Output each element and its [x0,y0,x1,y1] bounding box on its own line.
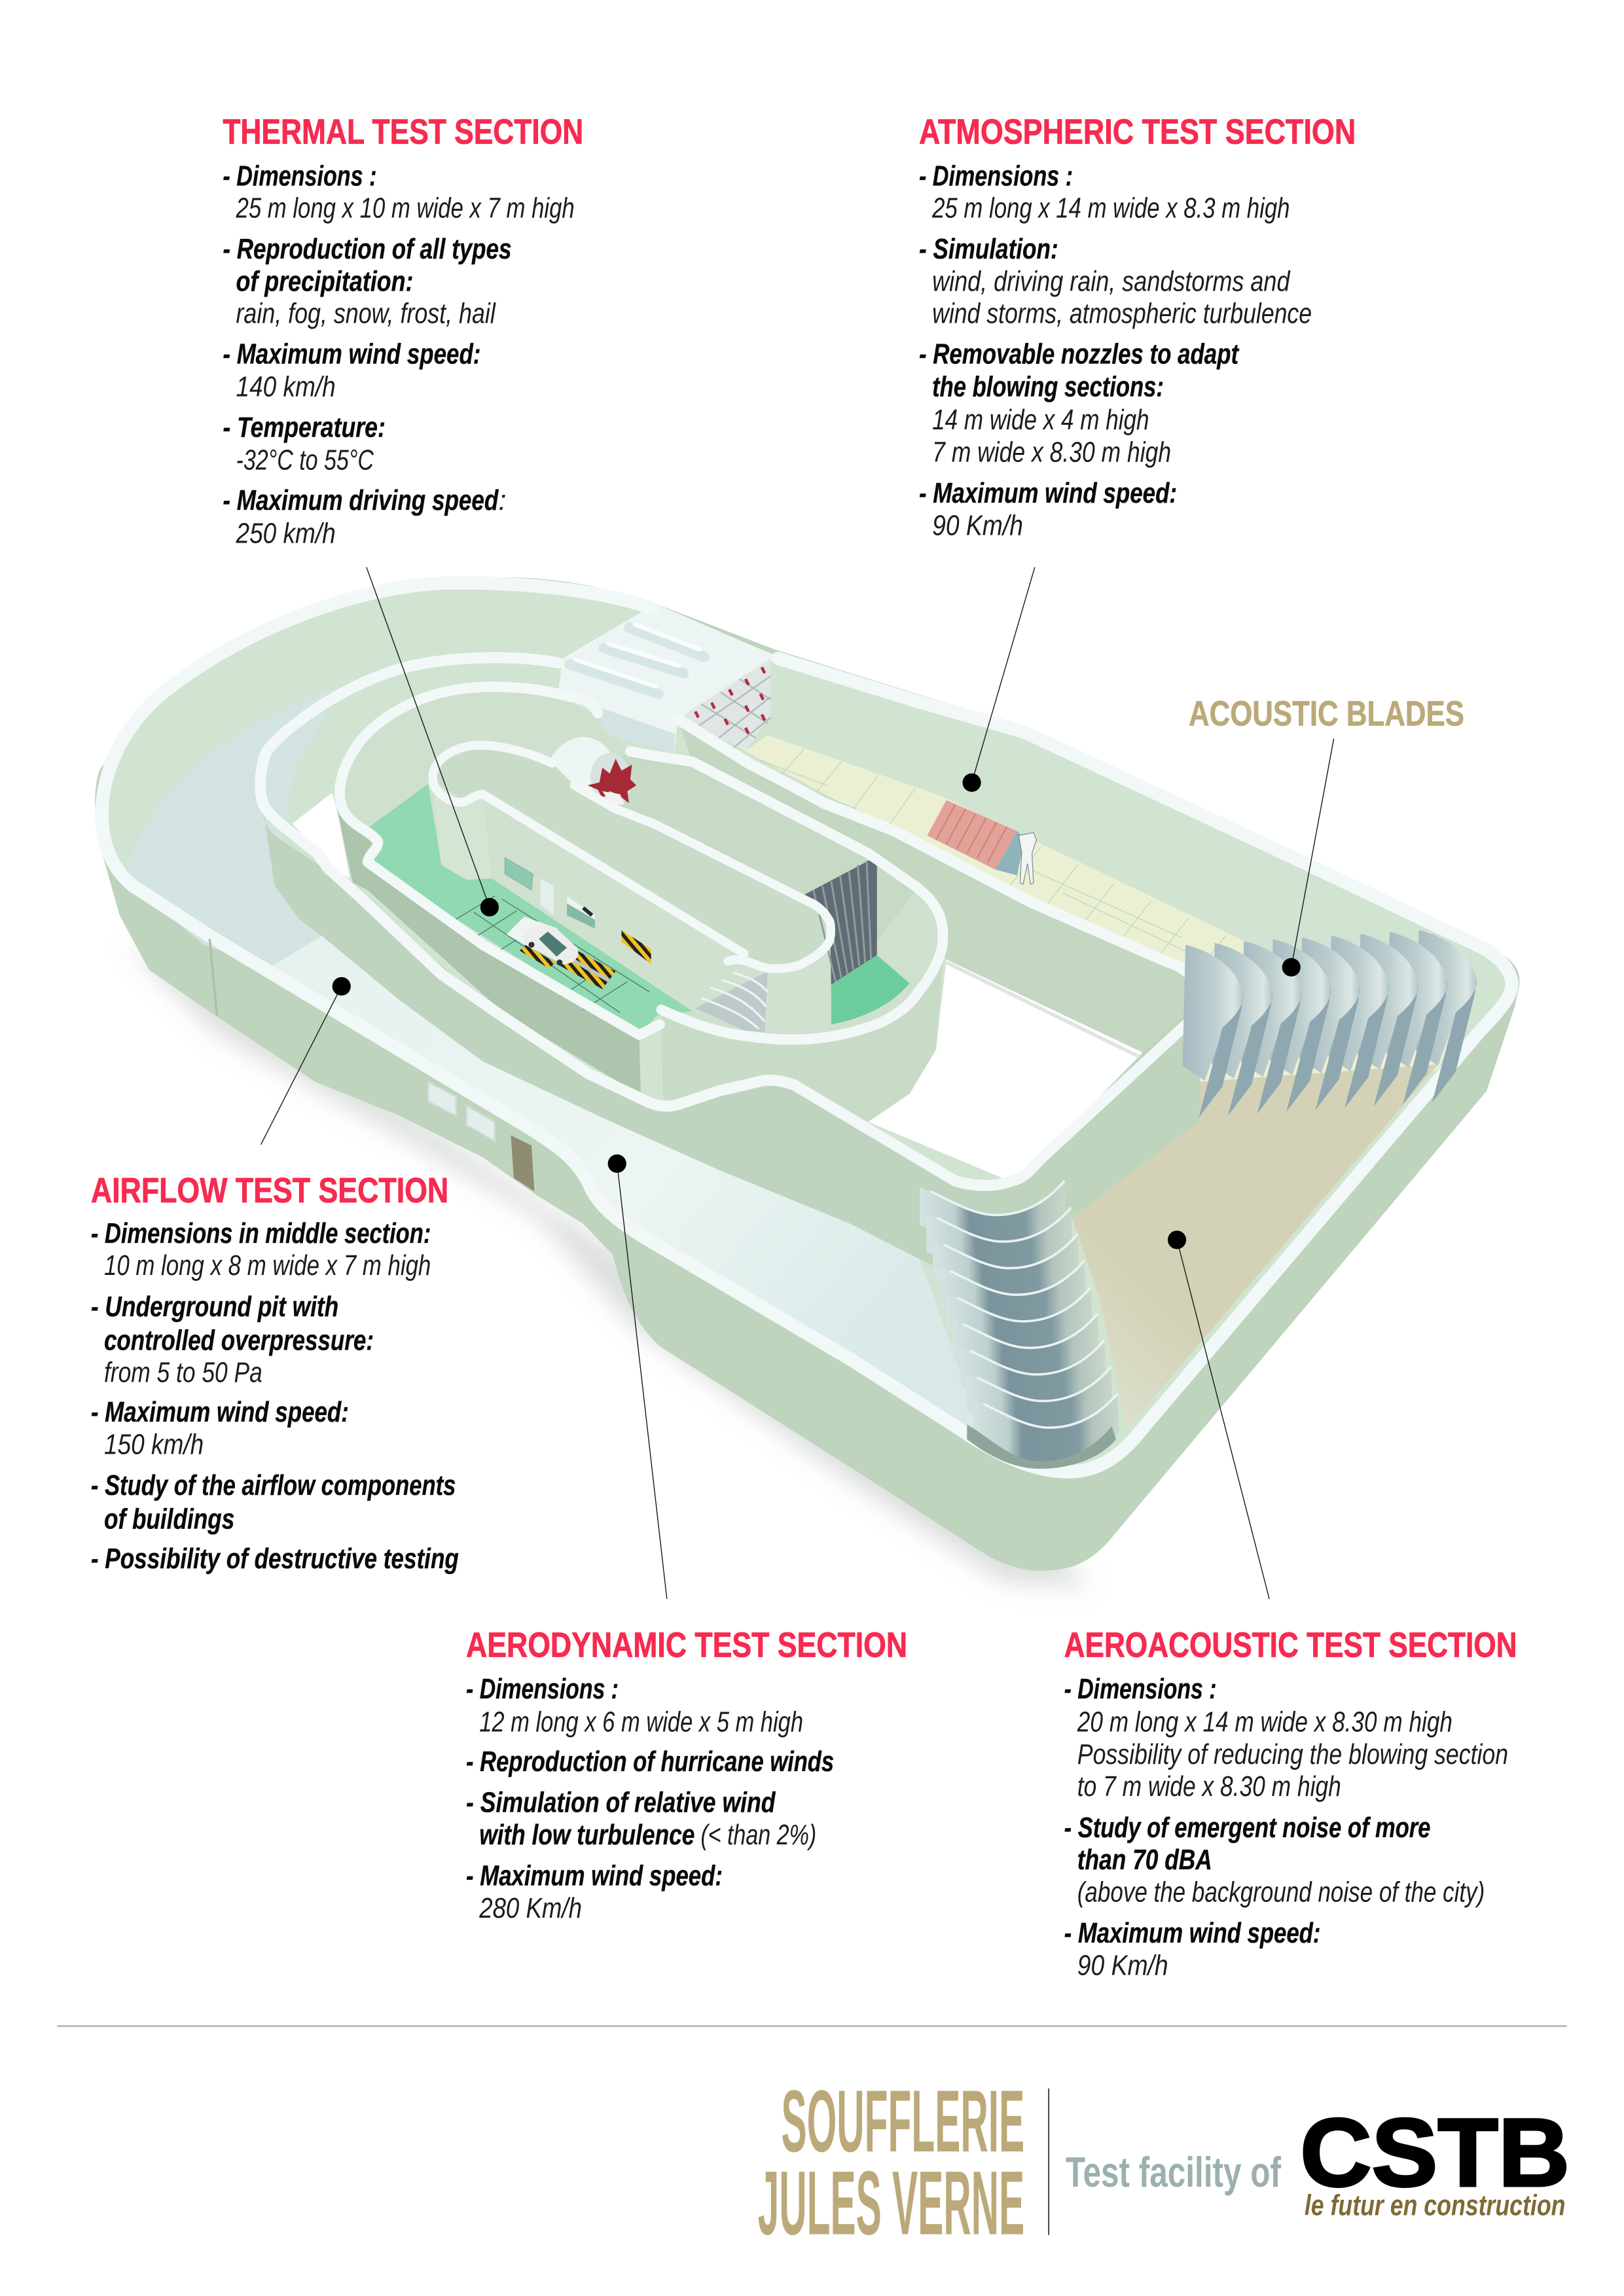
tagline: le futur en construction [1305,2189,1565,2222]
floor: aeroacoustic section [1072,1064,1438,1429]
heading: ATMOSPHERIC TEST SECTION [919,112,1356,151]
details: 12 m long x 6 m wide x 5 m high [479,1706,803,1738]
details: - Reproduction of all types [223,233,511,265]
details [223,160,575,550]
details: Possibility of reducing the blowing section [1077,1738,1508,1770]
details: - Study of emergent noise of more [1064,1812,1430,1844]
label: acoustic blades: ACOUSTIC BLADES [1189,694,1464,733]
details: wind, driving rain, sandstorms and [932,265,1291,297]
outer wall exterior [95,577,1519,1571]
details: 90 Km/h [1077,1949,1168,1981]
details: - Dimensions : [1064,1673,1217,1705]
logo: Soufflerie Jules Verne [758,2072,1024,2254]
details: 25 m long x 14 m wide x 8.3 m high [931,192,1290,224]
heading: AEROACOUSTIC TEST SECTION [1064,1625,1517,1664]
details: - Dimensions in middle section: [91,1217,431,1249]
details: 280 Km/h [478,1892,582,1924]
wall: thermal loop outer face [661,948,943,1122]
hazard floor markings [520,944,616,989]
details [91,1217,459,1575]
divider [57,2026,1567,2027]
panel: atmospheric test section [919,112,1356,541]
details: 25 m long x 10 m wide x 7 m high [236,192,575,224]
core cylinder end [433,782,492,880]
details: 10 m long x 8 m wide x 7 m high [104,1249,431,1282]
details: 20 m long x 14 m wide x 8.30 m high [1077,1706,1453,1738]
panel: airflow test section [91,1171,459,1575]
details: - Maximum wind speed: [91,1396,349,1428]
footer logos [758,2072,1570,2254]
details: -32°C to 55°C [236,444,374,476]
details: of precipitation: [236,265,413,297]
details: - Reproduction of hurricane winds [466,1746,834,1778]
details: - Dimensions : [466,1673,619,1705]
details: - Possibility of destructive testing [91,1543,459,1575]
details [919,160,1312,541]
details: 7 m wide x 8.30 m high [932,436,1171,468]
details: of buildings [104,1503,234,1535]
core far wall [433,745,830,969]
details: the blowing sections: [932,371,1164,403]
details: 90 Km/h [932,509,1023,541]
person figure [1019,833,1036,884]
details: - Simulation of relative wind [466,1787,776,1819]
pink turbulence grid [927,800,1024,875]
floor: thermal section [366,784,693,1035]
panel: aeroacoustic test section [1064,1625,1517,1981]
details: - Maximum wind speed: [919,477,1177,509]
heading: THERMAL TEST SECTION [223,112,583,151]
interior back wall [102,583,1512,1472]
details [466,1673,834,1924]
honeycomb grid with red cells [677,658,770,750]
leader line: atmospheric [972,567,1035,783]
thermal loop interior [340,687,942,1039]
diagram: wind tunnel building [95,577,1519,1587]
details: (< than 2%) [700,1819,816,1851]
wall: upper right face of middle loop [677,719,1206,1052]
details: 14 m wide x 4 m high [932,404,1149,436]
details: from 5 to 50 Pa [104,1357,262,1389]
details: 250 km/h [236,518,336,550]
floor grid: atmospheric section [761,749,1225,983]
details: rain, fog, snow, frost, hail [236,298,496,330]
marker dots [333,774,1301,1249]
floor: airflow section [128,687,341,967]
details: - Study of the airflow components [91,1469,456,1501]
details: - Dimensions : [223,160,376,192]
details: - Removable nozzles to adapt [919,338,1240,370]
wall: right face of middle loop [1011,989,1203,1218]
test facility text: Test facility of [1066,2148,1281,2196]
details: - Simulation: [919,233,1058,265]
details: 140 km/h [236,371,336,403]
thermal small blades [695,971,768,1032]
details: - Maximum wind speed: [223,338,480,370]
logo separator [1048,2089,1049,2235]
central void [868,960,1143,1179]
details: with low turbulence [479,1819,695,1851]
details [1064,1673,1508,1981]
details: - Underground pit with [91,1291,338,1323]
footer logos: SOUFFLERIE [781,2072,1024,2170]
wall: middle loop outer face [261,797,1076,1299]
panel: aerodynamic test section [466,1625,907,1924]
floor: thermal section right [831,955,909,1024]
leader line: aeroacoustic [1177,1240,1269,1599]
leader line: airflow [261,986,342,1145]
footer logos: JULES VERNE [758,2153,1024,2254]
wall rims [102,583,1512,1472]
details: (above the background noise of the city) [1077,1876,1485,1908]
details: to 7 m wide x 8.30 m high [1077,1770,1341,1803]
void below fan [549,819,601,859]
thermal windows and door [505,857,651,964]
details: - Dimensions : [919,160,1073,192]
dark vertical absorbers [804,856,877,984]
details: - Maximum wind speed: [466,1860,723,1892]
details: wind storms, atmospheric turbulence [932,298,1312,330]
floor grid: thermal section [450,896,649,1013]
exterior windows and door [209,939,534,1191]
fan [535,729,636,829]
core wall with windows [483,794,831,1033]
heading: AERODYNAMIC TEST SECTION [466,1625,907,1664]
details: controlled overpressure: [104,1324,374,1356]
acoustic blades upper row [1183,930,1477,1117]
details: 150 km/h [104,1428,204,1460]
details: than 70 dBA [1077,1844,1212,1876]
floor: aerodynamic section [270,936,989,1454]
details: - Temperature: [223,411,386,443]
acoustic blades lower row [920,1181,1119,1469]
ground shadow [126,944,1092,1587]
leader line: acoustic blades [1291,739,1334,967]
core lower wall in front of fan [573,785,809,951]
contraction collector [558,603,778,753]
details: - Maximum driving speed [223,484,499,516]
void shadow line [947,963,1140,1057]
leader line: aerodynamic [617,1164,667,1599]
left void [293,793,350,878]
core outer wall [574,751,918,944]
wall: thermal lower exterior [336,808,641,1096]
heading: AIRFLOW TEST SECTION [91,1171,448,1210]
logo: CSTB: CSTB [1300,2099,1570,2207]
details: - Maximum wind speed: [1064,1917,1320,1949]
test car [507,917,578,965]
leader line: thermal [367,567,490,907]
floor: atmospheric section [709,730,1454,1085]
panel: thermal test section [223,112,583,550]
details: : [498,484,506,516]
